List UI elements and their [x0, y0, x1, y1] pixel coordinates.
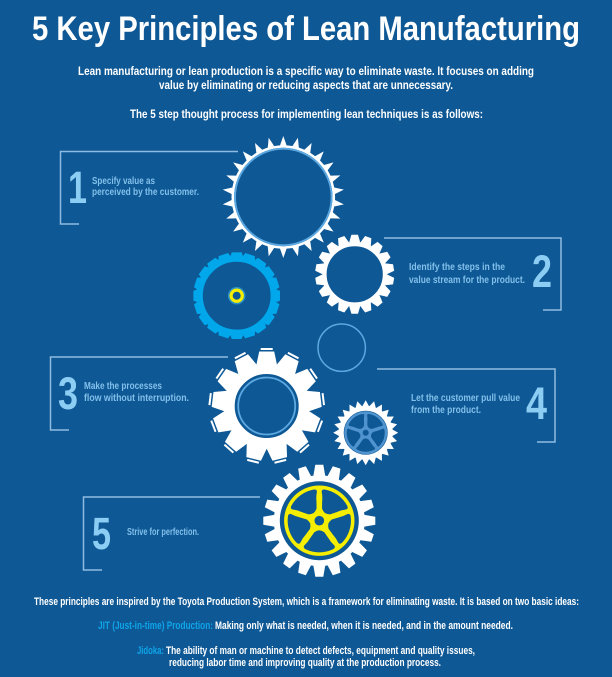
step 2 text: Identify the steps in the — [409, 261, 505, 273]
step 4 text: Let the customer pull value — [411, 392, 520, 404]
gear 1: large white spiked gear — [222, 136, 344, 258]
Jidoka definition: Jidoka: — [137, 645, 164, 657]
intro text — [78, 64, 534, 121]
Jidoka definition: reducing labor time and improving quality at the production process. — [169, 657, 441, 669]
intro text: value by eliminating or reducing aspects that are unnecessary. — [159, 78, 453, 92]
gear 4: large white cogged gear — [208, 348, 326, 465]
gear 3: bright blue gear with yellow hub — [193, 252, 280, 339]
step 1 bracket — [60, 152, 238, 224]
step 3 text — [84, 380, 189, 404]
step 2 text: value stream for the product. — [409, 274, 525, 286]
step 5 bracket — [84, 497, 260, 570]
gear 6: white gear with yellow spoked wheel — [263, 465, 375, 577]
step 2 bracket — [384, 238, 561, 310]
step 1 number: 1 — [68, 162, 87, 213]
step 5 text: Strive for perfection. — [127, 526, 199, 538]
step 2 text — [409, 261, 525, 286]
step 3 text: flow without interruption. — [84, 392, 189, 404]
intro text: The 5 step thought process for implementing lean techniques is as follows: — [130, 107, 483, 121]
step 5 number: 5 — [92, 508, 111, 559]
step 4 text — [411, 392, 520, 416]
Jidoka definition: The ability of man or machine to detect defects, equipment and quality issues, — [166, 645, 475, 657]
step 1 text — [92, 175, 199, 198]
step 3 bracket — [50, 357, 228, 430]
step 2 number: 2 — [532, 246, 552, 297]
JIT definition: JIT (Just-in-time) Production: — [98, 620, 213, 632]
step 4 text: from the product. — [411, 404, 481, 416]
step 1 text: perceived by the customer. — [92, 186, 199, 198]
Jidoka definition — [137, 645, 475, 669]
step 3 text: Make the processes — [84, 380, 162, 392]
step 4 number: 4 — [526, 378, 547, 429]
step 1 text: Specify value as — [92, 175, 155, 187]
step 3 number: 3 — [58, 368, 78, 419]
step 4 bracket — [377, 369, 555, 442]
gear 5: small white gear with blue wheel — [333, 400, 398, 465]
JIT definition — [98, 620, 513, 632]
gear 2: white gear, right — [315, 235, 395, 314]
JIT definition: Making only what is needed, when it is needed, and in the amount needed. — [215, 620, 513, 632]
thin outline circle — [318, 324, 365, 371]
